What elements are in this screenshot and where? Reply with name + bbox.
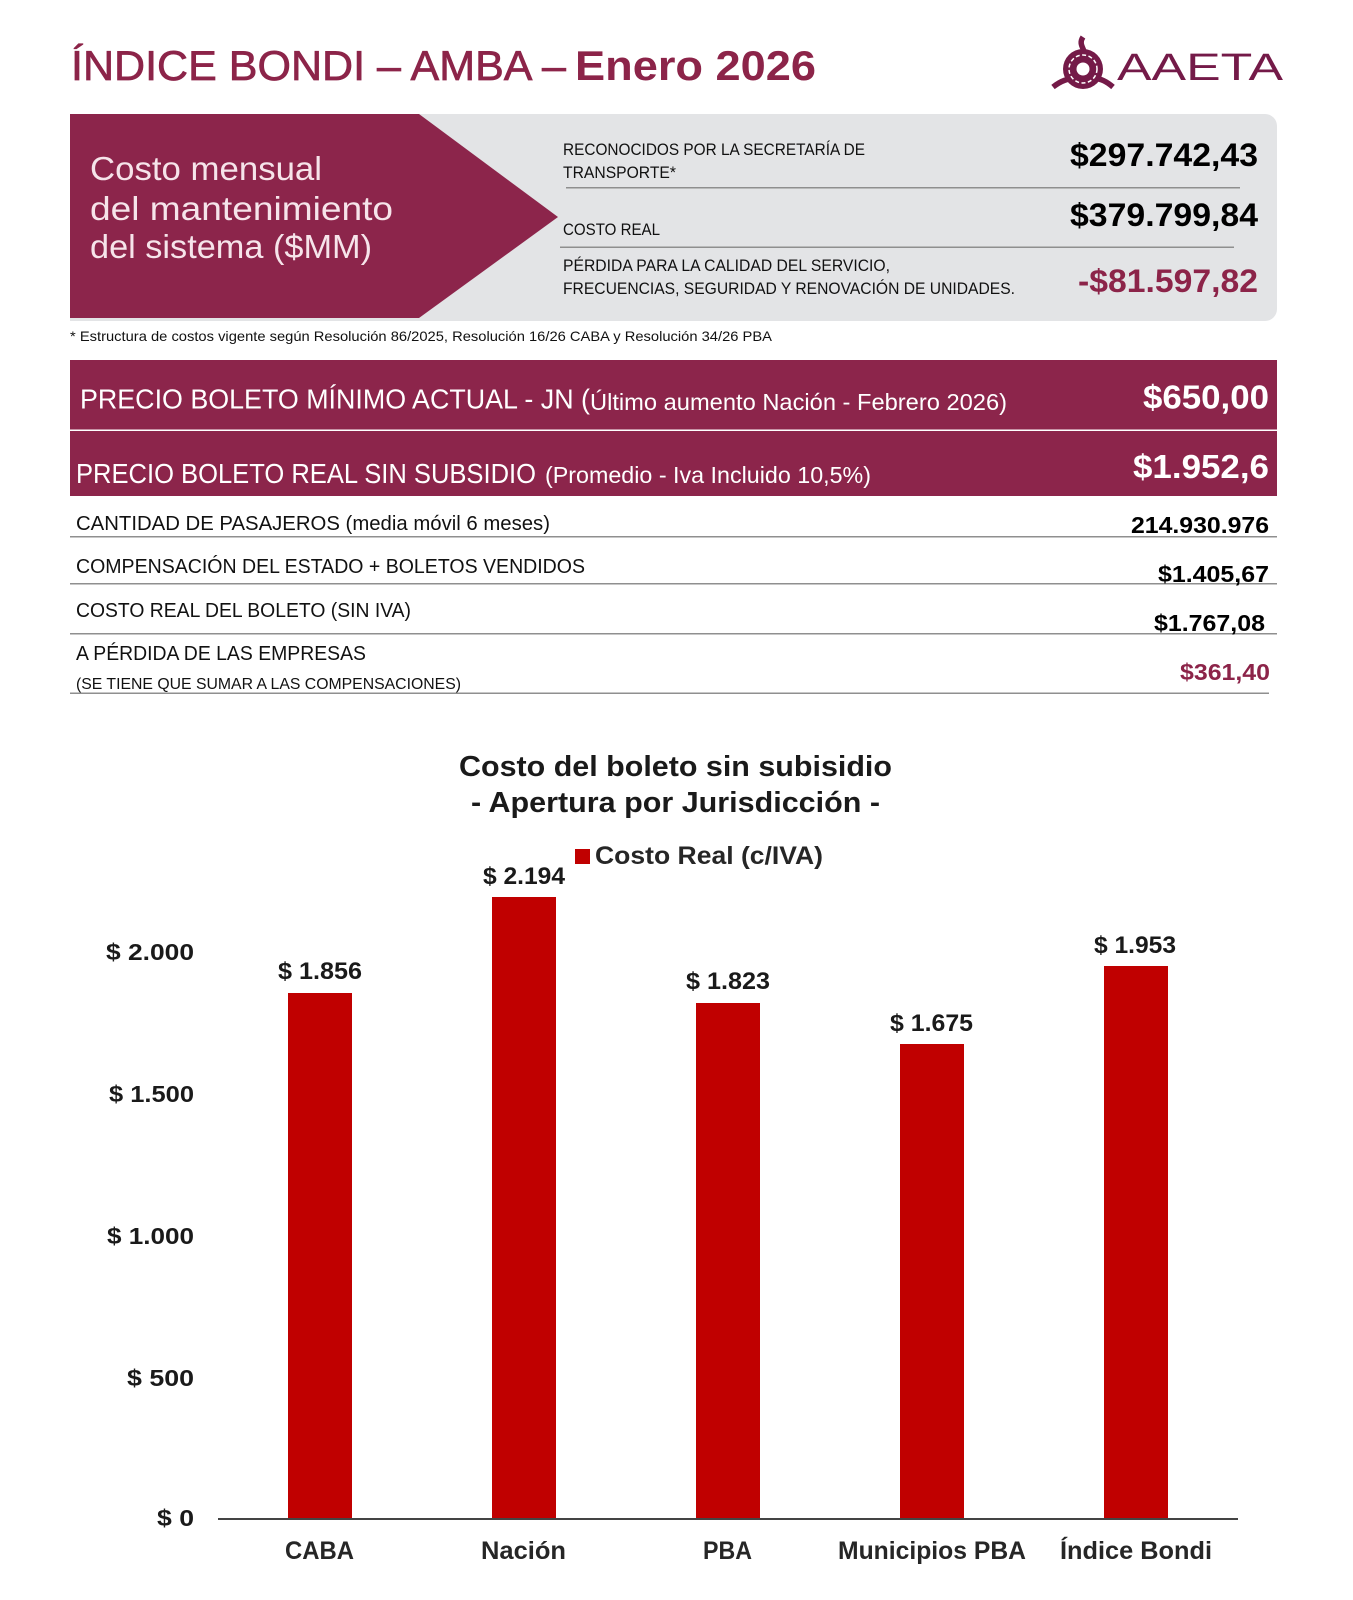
- y axis labels: $ 1.000: [107, 1223, 194, 1249]
- band: precio boleto real: $1.952,6: [1133, 448, 1269, 485]
- row: cantidad de pasajeros: 214.930.976: [1131, 512, 1269, 538]
- row: a pérdida de las empresas: (SE TIENE QUE SUMAR A LAS COMPENSACIONES): [76, 676, 461, 693]
- y axis labels: [106, 939, 194, 1531]
- logo: AAETA: AAETA: [1117, 47, 1284, 89]
- chart title: [459, 751, 892, 819]
- chart title: Costo del boleto sin subisidio: [459, 751, 892, 783]
- chart title: - Apertura por Jurisdicción -: [471, 787, 880, 819]
- band: precio boleto real: (Promedio - Iva Incluido 10,5%): [545, 462, 871, 488]
- row: a pérdida de las empresas: [70, 642, 1270, 694]
- bar: Índice Bondi: $ 1.953: [1094, 932, 1176, 959]
- row: costo real del boleto: COSTO REAL DEL BOLETO (SIN IVA): [76, 600, 411, 622]
- title: Enero 2026: [575, 42, 816, 89]
- row: costo real: COSTO REAL: [563, 221, 660, 239]
- row: compensación: COMPENSACIÓN DEL ESTADO + BOLETOS VENDIDOS: [76, 555, 585, 578]
- bar: PBA: PBA: [703, 1537, 752, 1565]
- arrow banner: del sistema ($MM): [90, 228, 372, 265]
- row: pérdida: -$81.597,82: [1078, 263, 1258, 299]
- panel: costo mensual: [70, 114, 1277, 321]
- row: reconocidos: TRANSPORTE*: [563, 164, 677, 182]
- arrow banner: del mantenimiento: [90, 190, 393, 227]
- row: a pérdida de las empresas: A PÉRDIDA DE LAS EMPRESAS: [76, 642, 366, 665]
- band: precio boleto mínimo: PRECIO BOLETO MÍNIMO ACTUAL - JN (: [80, 384, 590, 414]
- title: [71, 42, 816, 89]
- bar: Municipios PBA: Municipios PBA: [838, 1537, 1026, 1565]
- row: costo real del boleto: $1.767,08: [1154, 610, 1265, 636]
- arrow banner: [70, 114, 558, 318]
- arrow banner: Costo mensual: [90, 150, 322, 187]
- row: reconocidos: RECONOCIDOS POR LA SECRETARÍA DE: [563, 140, 865, 159]
- row: reconocidos: [563, 137, 1258, 182]
- bar: CABA: CABA: [285, 1537, 354, 1565]
- row: pérdida: FRECUENCIAS, SEGURIDAD Y RENOVACIÓN DE UNIDADES.: [563, 279, 1015, 298]
- row: cantidad de pasajeros: [70, 512, 1277, 538]
- band: precio boleto mínimo: $650,00: [1143, 378, 1269, 416]
- y axis labels: $ 500: [127, 1365, 194, 1391]
- bar: Municipios PBA: [838, 1010, 1026, 1565]
- bar: CABA: [278, 958, 362, 1565]
- y axis labels: $ 2.000: [106, 939, 194, 965]
- band: precio boleto mínimo: [70, 360, 1277, 430]
- bar: Municipios PBA: $ 1.675: [890, 1010, 973, 1037]
- logo: AAETA: [1053, 37, 1284, 89]
- title: ÍNDICE BONDI – AMBA –: [71, 42, 567, 89]
- row: a pérdida de las empresas: $361,40: [1180, 659, 1270, 685]
- row: reconocidos: $297.742,43: [1070, 137, 1258, 173]
- bar chart: [106, 863, 1238, 1565]
- bar: PBA: $ 1.823: [686, 968, 770, 995]
- row: pérdida: [563, 256, 1258, 299]
- row: compensación: [70, 555, 1277, 587]
- row: costo real: [563, 197, 1258, 239]
- row: costo real del boleto: [70, 600, 1277, 636]
- row: compensación: $1.405,67: [1158, 561, 1269, 587]
- band: precio boleto real: PRECIO BOLETO REAL SIN SUBSIDIO: [76, 458, 536, 489]
- band: precio boleto mínimo: Último aumento Nación - Febrero 2026): [590, 389, 1007, 415]
- y axis labels: $ 1.500: [109, 1081, 194, 1107]
- bar: Nación: Nación: [481, 1537, 566, 1565]
- bar: Nación: $ 2.194: [483, 863, 566, 890]
- bar: Índice Bondi: Índice Bondi: [1060, 1536, 1212, 1565]
- footnote: * Estructura de costos vigente según Resolución 86/2025, Resolución 16/26 CABA y Resolución 34/26 PBA: [70, 328, 773, 344]
- bar: CABA: $ 1.856: [278, 958, 362, 985]
- row: pérdida: PÉRDIDA PARA LA CALIDAD DEL SERVICIO,: [563, 256, 890, 275]
- bar: PBA: [686, 968, 770, 1565]
- band: precio boleto real: [70, 431, 1277, 496]
- legend: Costo Real (c/IVA): [595, 842, 823, 870]
- row: cantidad de pasajeros: CANTIDAD DE PASAJEROS (media móvil 6 meses): [76, 513, 550, 535]
- row: costo real: $379.799,84: [1070, 197, 1258, 233]
- bar: Nación: [481, 863, 566, 1565]
- bar: Índice Bondi: [1060, 932, 1212, 1565]
- y axis labels: $ 0: [157, 1505, 194, 1531]
